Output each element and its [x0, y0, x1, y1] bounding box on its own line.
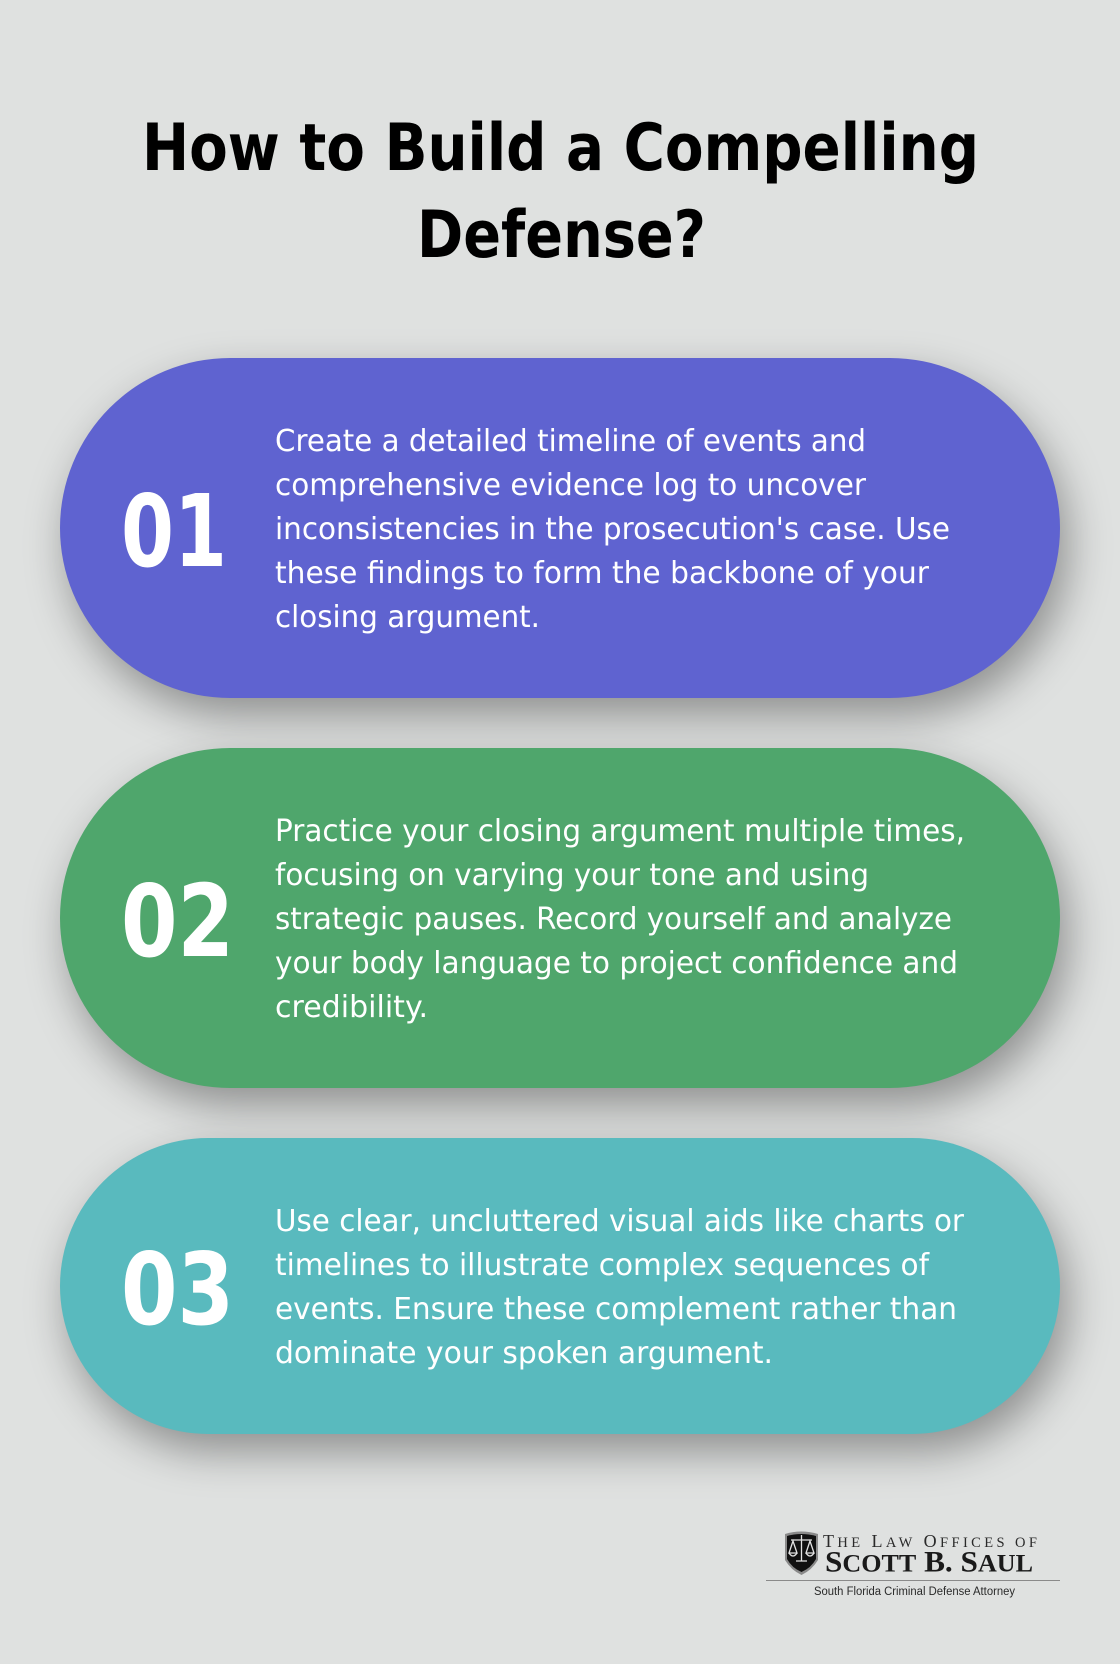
- text block: step 03: dominate your spoken argument.: [275, 1336, 773, 1371]
- text block: step 02: strategic pauses. Record yourself and analyze: [275, 902, 952, 937]
- text block: step 03: timelines to illustrate complex sequences of: [275, 1248, 930, 1283]
- number 03: 03: [121, 1231, 234, 1348]
- text block: step 03: [275, 1204, 964, 1371]
- text block: step 01: these findings to form the backbone of your: [275, 556, 929, 591]
- text block: step 01: [275, 424, 950, 635]
- logo text: scott b. saul: SCOTT B. SAUL: [825, 1546, 1033, 1578]
- title: How to Build a Compelling: [142, 111, 979, 186]
- text block: step 02: your body language to project confidence and: [275, 946, 958, 981]
- title: [142, 111, 979, 273]
- text block: step 03: Use clear, uncluttered visual aids like charts or: [275, 1204, 964, 1239]
- text block: step 03: events. Ensure these complement rather than: [275, 1292, 957, 1327]
- text block: step 02: focusing on varying your tone and using: [275, 858, 869, 893]
- logo text: tagline: South Florida Criminal Defense Attorney: [814, 1586, 1015, 1598]
- text block: step 01: inconsistencies in the prosecution's case. Use: [275, 512, 950, 547]
- title: Defense?: [417, 198, 706, 273]
- icon: shield with scales: [785, 1532, 818, 1575]
- number 02: 02: [121, 863, 234, 980]
- text block: step 01: closing argument.: [275, 600, 540, 635]
- text block: step 02: [275, 814, 965, 1025]
- panel: step 02: [60, 748, 1060, 1088]
- panel: step 01: [60, 358, 1060, 698]
- text block: step 01: Create a detailed timeline of events and: [275, 424, 866, 459]
- panel: step 03: [60, 1138, 1060, 1434]
- text block: step 02: Practice your closing argument multiple times,: [275, 814, 965, 849]
- number 01: 01: [121, 473, 227, 590]
- text block: step 01: comprehensive evidence log to uncover: [275, 468, 866, 503]
- text block: step 02: credibility.: [275, 990, 428, 1025]
- logo text: the law offices of: THE LAW OFFICES OF: [823, 1531, 1037, 1551]
